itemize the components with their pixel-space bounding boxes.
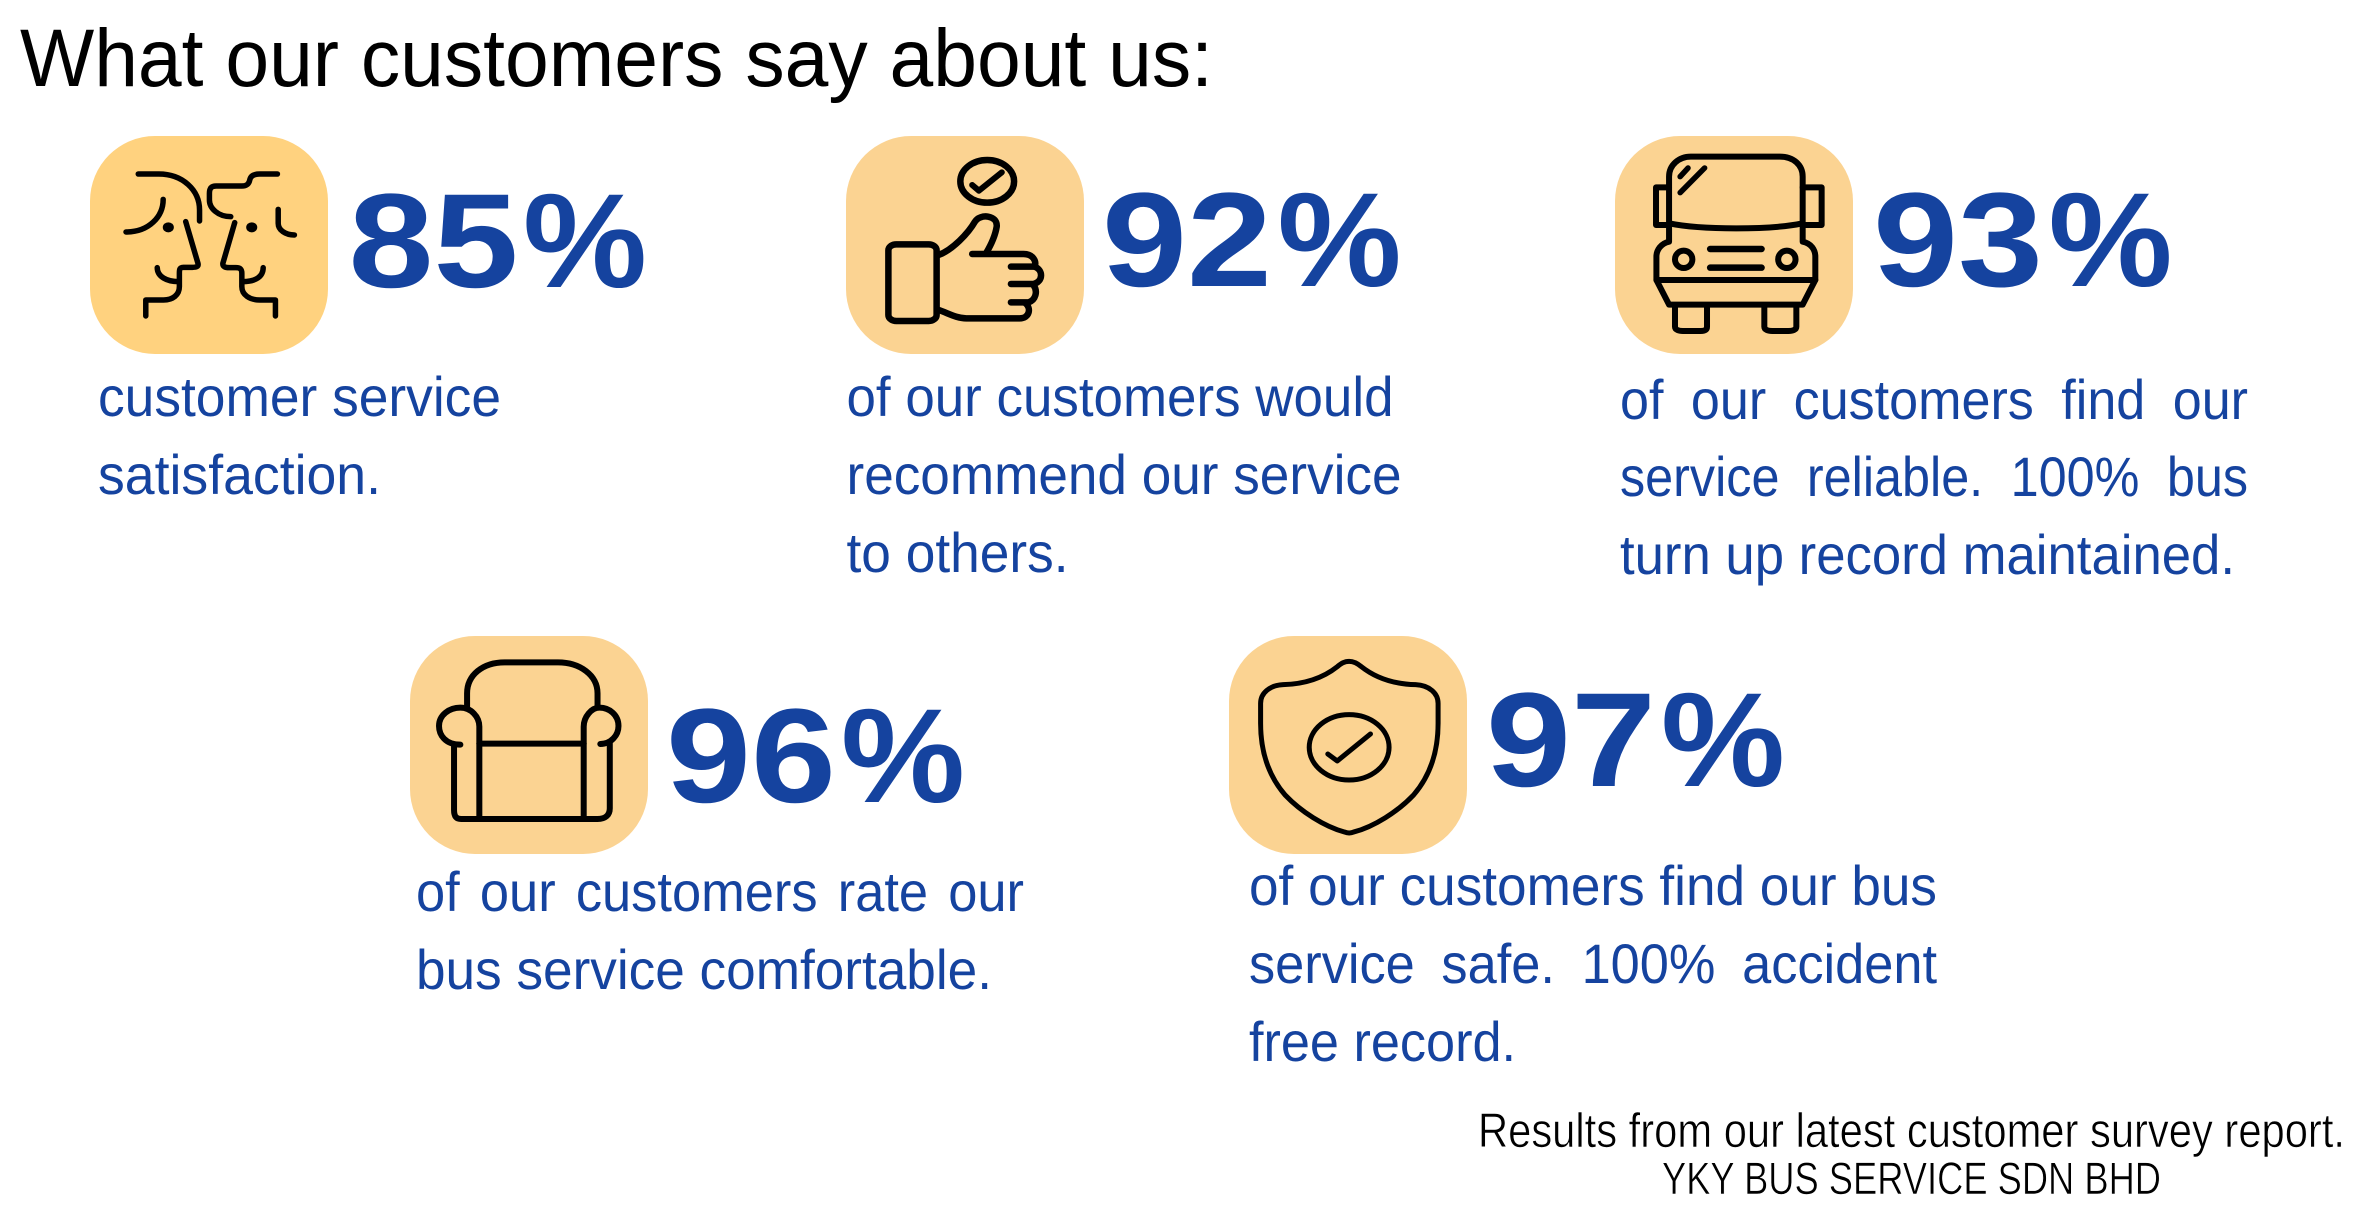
stat: 92%: % [1278,166,1402,315]
stat: 92%: 92 [1102,166,1272,315]
footer note [1478,1105,2345,1204]
panel: safe 97% [1229,636,1937,1073]
panel: customer service satisfaction 85% [90,136,647,506]
panel: comfortable 96% [410,636,1024,1001]
stat: 85%: 85 [348,167,518,316]
icon tile: bus [1615,136,1853,354]
description: customer service: customer service [98,365,501,428]
icon tile: two faces [90,136,328,354]
stat: 92% [1102,166,1402,315]
stat: 93% [1873,166,2172,315]
footer note: YKY BUS SERVICE SDN BHD [1662,1153,2161,1204]
stat: 97%: % [1661,666,1785,815]
stat: 97%: 97 [1486,666,1656,815]
panel: would recommend 92% [846,136,1402,584]
description: comfortable: of our customers rate our [416,860,1024,923]
description: reliable: turn up record maintained. [1620,523,2235,586]
stat: 96%: % [841,682,965,831]
stat: 97% [1486,666,1785,815]
stat: 85% [348,167,647,316]
icon tile: shield [1229,636,1467,854]
description: customer service: satisfaction. [98,443,381,506]
stat: 96%: 96 [666,682,836,831]
description: recommend: of our customers would [846,365,1394,428]
description: recommend: to others. [846,521,1068,584]
stat: 93%: % [2048,166,2172,315]
icon tile: armchair [410,636,648,854]
description: comfortable [416,860,1024,1001]
icon tile: thumbs up [846,136,1084,354]
description: safe [1249,854,1937,1073]
description: safe: free record. [1249,1010,1516,1073]
description: reliable: service reliable. 100% bus [1620,445,2248,508]
description: recommend [846,365,1402,584]
description: reliable [1620,368,2248,586]
description: comfortable: bus service comfortable. [416,938,992,1001]
stat: 96% [666,682,965,831]
description: safe: service safe. 100% accident [1249,932,1937,995]
stat: 93%: 93 [1873,166,2043,315]
panel: reliable service 93% [1615,136,2248,586]
description: recommend: recommend our service [846,443,1402,506]
description: customer service [98,365,501,506]
title: What our customers say about us: [20,13,1213,104]
stat: 85%: % [523,167,647,316]
description: reliable: of our customers find our [1620,368,2248,431]
description: safe: of our customers find our bus [1249,854,1937,917]
